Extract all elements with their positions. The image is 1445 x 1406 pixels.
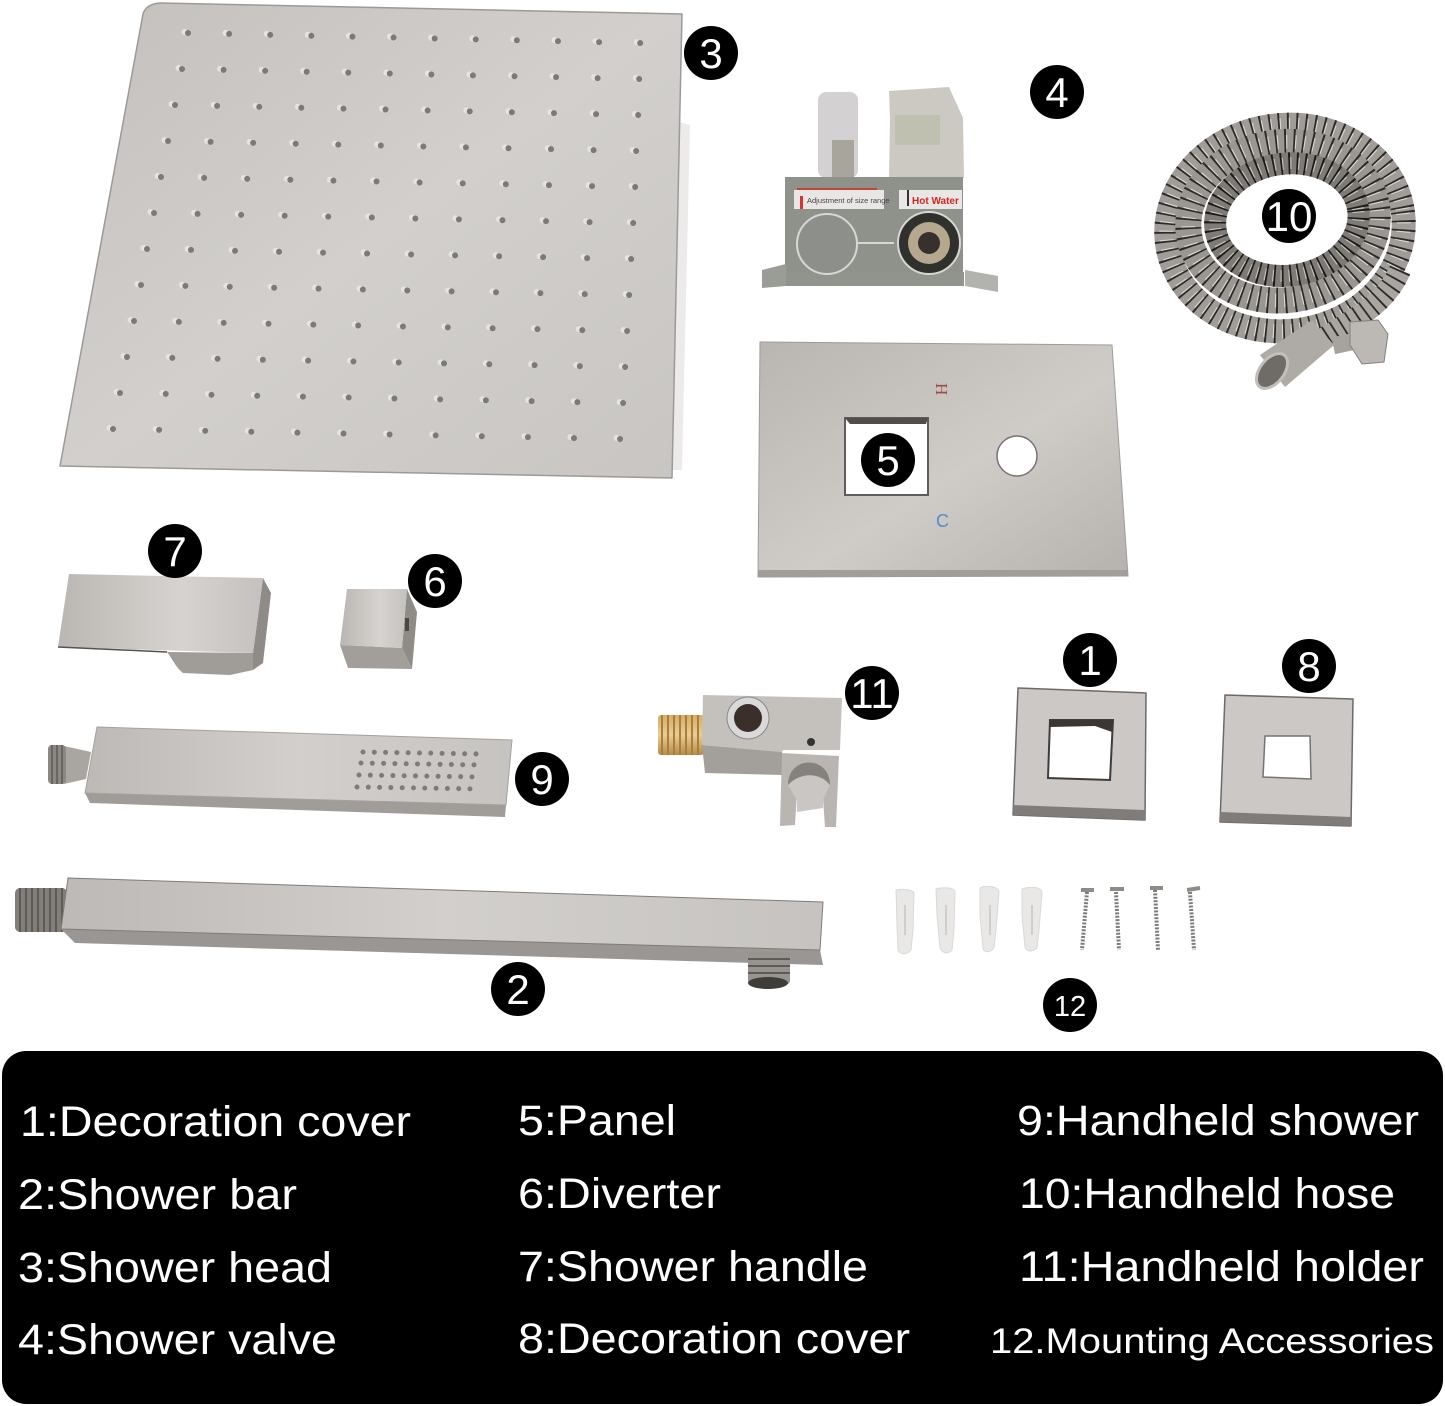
panel: H — [932, 383, 951, 395]
badge 6 — [408, 554, 462, 608]
badge 3: 3 — [699, 30, 723, 77]
legend column 3: 9:Handheld shower — [1017, 1097, 1419, 1145]
diverter — [340, 589, 417, 669]
legend column 2: 5:Panel — [518, 1097, 676, 1145]
shower bar — [15, 878, 823, 989]
badge 7 — [148, 524, 202, 578]
badge 8 — [1282, 639, 1336, 693]
badge 11: 11 — [850, 670, 894, 717]
legend column 3 — [990, 1097, 1434, 1361]
badge 8: 8 — [1297, 643, 1321, 690]
shower valve — [762, 87, 998, 292]
wall plugs — [896, 886, 1042, 954]
badge 3 — [684, 26, 738, 80]
badge 4: 4 — [1045, 69, 1069, 116]
legend column 2: 8:Decoration cover — [518, 1315, 910, 1363]
badge 12 — [1043, 978, 1097, 1032]
legend column 3: 12.Mounting Accessories — [990, 1322, 1434, 1361]
badge 6: 6 — [423, 558, 447, 605]
legend column 1: 2:Shower bar — [18, 1171, 297, 1219]
badge 1: 1 — [1078, 637, 1102, 684]
decoration cover 8 — [1220, 695, 1353, 826]
badge 4 — [1030, 65, 1084, 119]
badge 1 — [1063, 633, 1117, 687]
badge 2: 2 — [506, 966, 530, 1013]
legend column 1: 3:Shower head — [18, 1244, 332, 1292]
handheld holder — [658, 695, 842, 828]
hose connector — [1250, 320, 1388, 394]
shower valve: Hot Water — [912, 196, 959, 207]
legend column 2 — [518, 1097, 910, 1363]
screws — [1081, 888, 1200, 950]
badge 9: 9 — [530, 756, 554, 803]
shower valve: Adjustment of size range — [807, 196, 890, 205]
badge 5 — [861, 433, 915, 487]
handheld shower — [48, 727, 512, 817]
badge 10: 10 — [1266, 193, 1312, 240]
decoration cover 1 — [1013, 688, 1146, 820]
legend column 1: 4:Shower valve — [18, 1316, 337, 1364]
badge 5: 5 — [876, 437, 900, 484]
shower handle — [58, 574, 271, 675]
legend column 2: 7:Shower handle — [518, 1243, 868, 1291]
legend column 3: 10:Handheld hose — [1019, 1170, 1395, 1218]
badge 12: 12 — [1054, 991, 1086, 1023]
handheld hose — [1153, 109, 1417, 347]
badge 7: 7 — [163, 528, 187, 575]
legend panel — [2, 1051, 1443, 1404]
legend column 3: 11:Handheld holder — [1019, 1243, 1424, 1291]
legend column 1: 1:Decoration cover — [20, 1098, 411, 1146]
shower head — [60, 3, 690, 478]
legend column 2: 6:Diverter — [518, 1170, 721, 1218]
badge 2 — [491, 962, 545, 1016]
panel: C — [936, 511, 949, 531]
badge 9 — [515, 752, 569, 806]
panel — [758, 342, 1128, 577]
legend column 1 — [18, 1098, 411, 1364]
